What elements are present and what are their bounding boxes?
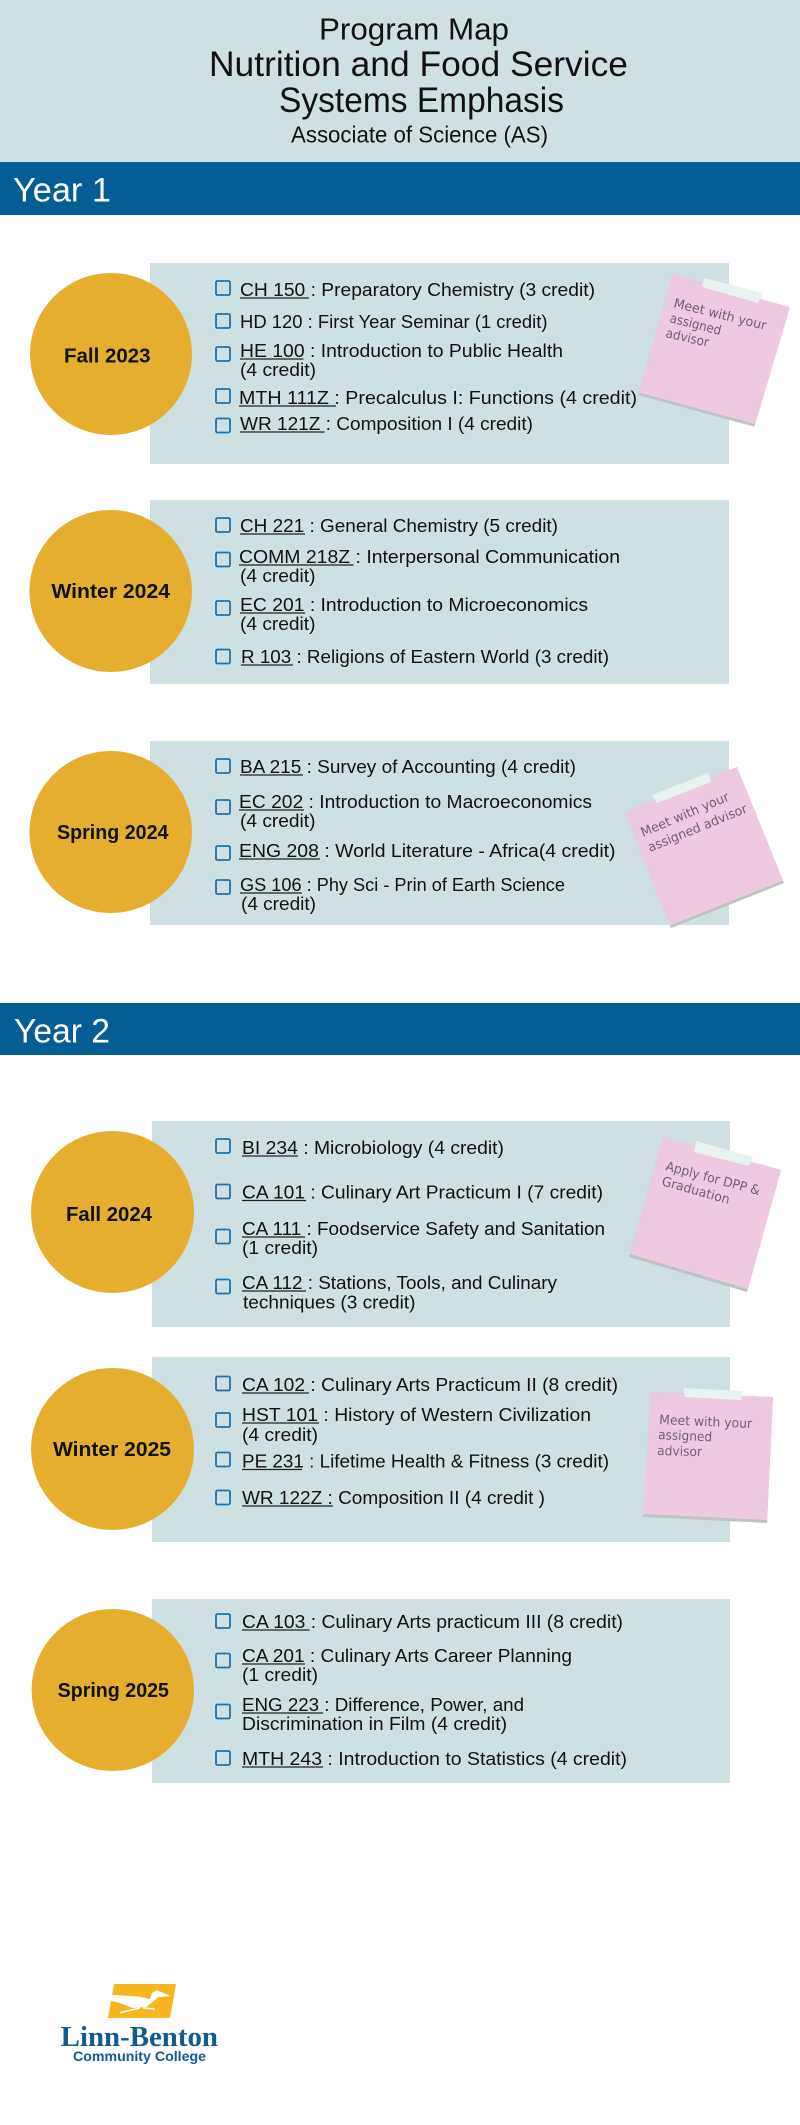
sticky note: meet with your assigned advisor (Fall 2023): Meet with your bbox=[672, 296, 768, 334]
semester circle: Winter 2025: Winter 2025 bbox=[53, 1439, 171, 1461]
logo: Linn-Benton Community College: Linn-Benton bbox=[61, 2022, 218, 2053]
course: CA 102: CA 102 : Culinary Arts Practicum II (8 credit) bbox=[242, 1374, 618, 1395]
sticky note: apply for DPP and graduation bbox=[629, 1137, 781, 1292]
panel: Spring 2024 bbox=[29, 741, 729, 925]
course: HE 100: HE 100 : Introduction to Public Health bbox=[240, 340, 563, 361]
sticky note: meet with your assigned advisor (Fall 2023): advisor bbox=[664, 326, 711, 351]
course: COMM 218Z bbox=[216, 546, 620, 586]
course: MTH 111Z: MTH 111Z : Precalculus I: Functions (4 credit) bbox=[239, 387, 637, 408]
course: EC 202: EC 202 : Introduction to Macroeconomics bbox=[239, 791, 592, 812]
year 2 band bbox=[0, 1003, 800, 1055]
course: HST 101: (4 credit) bbox=[242, 1424, 318, 1445]
semester circle: Fall 2024 bbox=[31, 1131, 194, 1293]
sticky note: meet with your assigned advisor (Spring 2024) bbox=[625, 767, 784, 928]
course: EC 201: (4 credit) bbox=[240, 613, 316, 634]
semester circle: Fall 2024: Fall 2024 bbox=[66, 1204, 153, 1226]
course: GS 106: GS 106 : Phy Sci - Prin of Earth Science bbox=[240, 874, 565, 895]
course: MTH 243: MTH 243 : Introduction to Statistics (4 credit) bbox=[242, 1748, 627, 1769]
course: HD 120: HD 120 : First Year Seminar (1 credit) bbox=[240, 311, 548, 332]
semester circle: Fall 2023 bbox=[30, 273, 192, 435]
sticky note: meet with your assigned advisor (Spring 2024): assigned advisor bbox=[646, 802, 750, 856]
course: BA 215: BA 215 : Survey of Accounting (4 credit) bbox=[240, 756, 576, 777]
year 1 band bbox=[0, 162, 800, 215]
course: CH 150: CH 150 : Preparatory Chemistry (3 credit) bbox=[240, 279, 595, 300]
panel: Winter 2024 bbox=[29, 500, 729, 684]
sticky note: meet with your assigned advisor (Winter 2025): Meet with your bbox=[659, 1413, 753, 1432]
semester circle: Winter 2024 bbox=[29, 510, 192, 672]
course: EC 202: (4 credit) bbox=[240, 810, 316, 831]
icon: roadrunner badge bbox=[103, 1984, 176, 2018]
course: WR 121Z: WR 121Z : Composition I (4 credit) bbox=[240, 413, 533, 434]
course: CA 112: techniques (3 credit) bbox=[243, 1292, 416, 1312]
course: CA 111: CA 111 : Foodservice Safety and Sanitation bbox=[242, 1218, 605, 1239]
course: COMM 218Z: COMM 218Z : Interpersonal Communication bbox=[239, 546, 620, 567]
course: ENG 223: ENG 223 : Difference, Power, and bbox=[242, 1694, 524, 1715]
course: COMM 218Z: (4 credit) bbox=[240, 565, 316, 586]
course: CA 111: (1 credit) bbox=[242, 1237, 318, 1258]
course: CA 201: (1 credit) bbox=[242, 1664, 318, 1685]
semester circle: Spring 2024 bbox=[29, 751, 192, 913]
course: GS 106: (4 credit) bbox=[241, 893, 316, 914]
logo: Linn-Benton Community College bbox=[61, 1984, 218, 2064]
sticky note: meet with your assigned advisor (Fall 2023): assigned bbox=[668, 311, 723, 339]
year 1 band: Year 1 bbox=[13, 172, 111, 210]
course: HE 100 bbox=[216, 340, 563, 380]
course: R 103: R 103 : Religions of Eastern World (3 credit) bbox=[241, 646, 609, 667]
course: CH 221: CH 221 : General Chemistry (5 credit) bbox=[240, 515, 558, 536]
course: CA 112 bbox=[216, 1272, 558, 1312]
semester circle: Winter 2024: Winter 2024 bbox=[51, 581, 171, 603]
course: ENG 223 bbox=[216, 1694, 524, 1734]
course: CA 103: CA 103 : Culinary Arts practicum III (8 credit) bbox=[242, 1611, 623, 1632]
header panel bbox=[0, 0, 800, 163]
semester circle: Spring 2025: Spring 2025 bbox=[58, 1680, 169, 1702]
sticky note: meet with your assigned advisor (Fall 2023) bbox=[638, 274, 790, 427]
sticky note: apply for DPP and graduation: Apply for DPP & bbox=[664, 1159, 762, 1199]
course: EC 201 bbox=[216, 594, 588, 634]
sticky note: meet with your assigned advisor (Winter 2025): assigned bbox=[658, 1428, 712, 1445]
course: PE 231: PE 231 : Lifetime Health & Fitness (3 credit) bbox=[242, 1450, 609, 1472]
panel: Winter 2025 bbox=[31, 1357, 730, 1542]
header panel: Associate of Science (AS) bbox=[291, 122, 548, 148]
sticky note: apply for DPP and graduation: Graduation bbox=[660, 1174, 731, 1208]
panel: Fall 2024 bbox=[31, 1121, 730, 1327]
semester circle: Spring 2024: Spring 2024 bbox=[57, 822, 169, 844]
sticky note: meet with your assigned advisor (Winter 2025): advisor bbox=[657, 1444, 703, 1460]
header panel: Program Map bbox=[319, 12, 509, 46]
course: HE 100: (4 credit) bbox=[240, 359, 316, 380]
course: CA 111 bbox=[216, 1218, 605, 1258]
course: ENG 208: ENG 208 : World Literature - Africa(4 credit) bbox=[239, 840, 616, 861]
header panel: Systems Emphasis bbox=[279, 81, 564, 120]
course: HST 101 bbox=[216, 1404, 591, 1445]
panel: Fall 2023 bbox=[30, 263, 729, 464]
course: EC 201: EC 201 : Introduction to Microeconomics bbox=[240, 594, 588, 615]
course: WR 122Z: WR 122Z : Composition II (4 credit ) bbox=[242, 1487, 545, 1508]
semester circle: Spring 2025 bbox=[32, 1609, 194, 1771]
course: CA 201 bbox=[216, 1645, 572, 1685]
semester circle: Winter 2025 bbox=[31, 1368, 194, 1530]
sticky note: meet with your assigned advisor (Spring 2024): Meet with your bbox=[639, 790, 732, 841]
panel: Spring 2025 bbox=[32, 1599, 730, 1783]
course: EC 202 bbox=[216, 791, 592, 831]
course: ENG 223: Discrimination in Film (4 credit) bbox=[242, 1713, 507, 1734]
year 2 band: Year 2 bbox=[14, 1012, 110, 1050]
course: BI 234: BI 234 : Microbiology (4 credit) bbox=[242, 1137, 504, 1158]
logo: Linn-Benton Community College: Community College bbox=[73, 2049, 207, 2064]
header panel: Nutrition and Food Service bbox=[209, 45, 628, 84]
course: CA 112: CA 112 : Stations, Tools, and Culinary bbox=[242, 1272, 558, 1293]
course: HST 101: HST 101 : History of Western Civilization bbox=[242, 1404, 591, 1425]
semester circle: Fall 2023: Fall 2023 bbox=[64, 346, 150, 368]
course: GS 106 bbox=[216, 874, 565, 914]
sticky note: meet with your assigned advisor (Winter 2025) bbox=[643, 1388, 773, 1523]
course: CA 201: CA 201 : Culinary Arts Career Planning bbox=[242, 1645, 572, 1666]
course: CA 101: CA 101 : Culinary Art Practicum I (7 credit) bbox=[242, 1182, 603, 1202]
